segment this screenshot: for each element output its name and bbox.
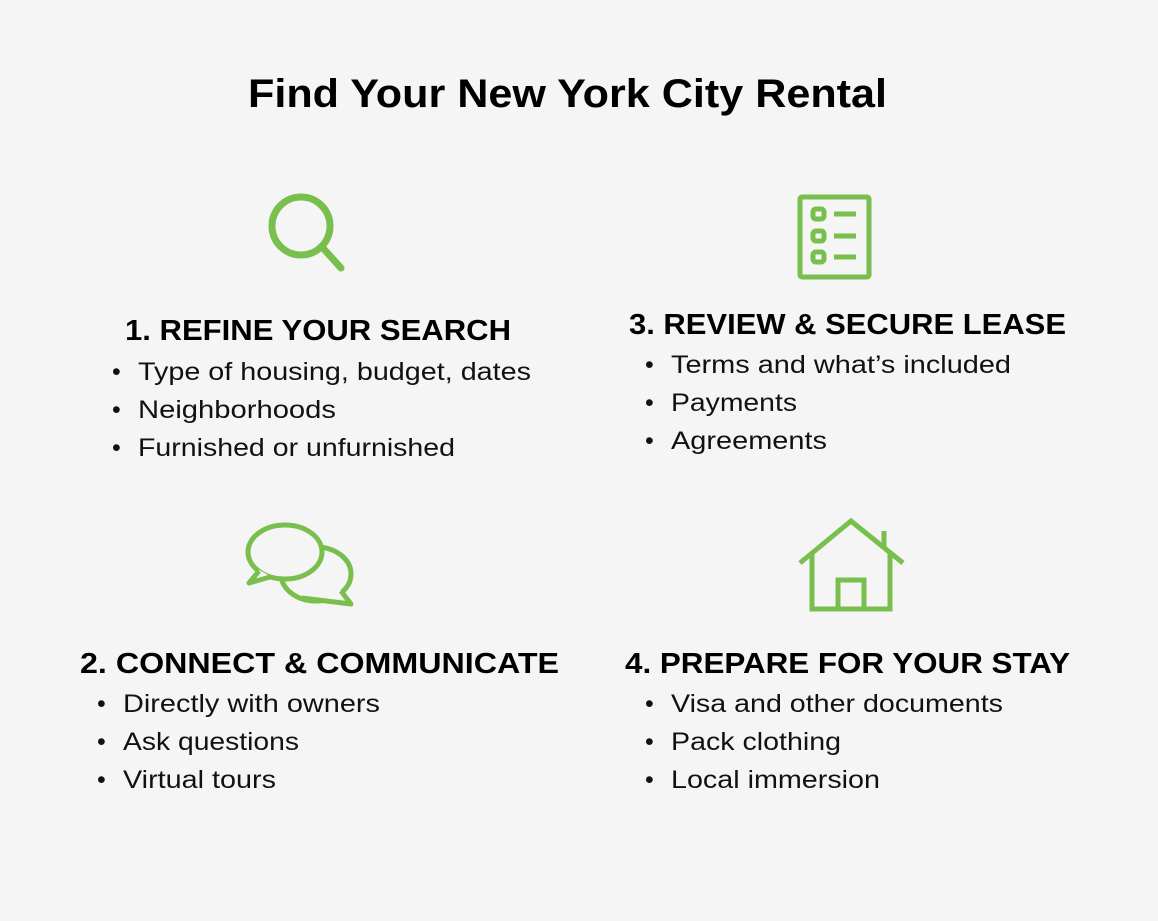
- panel: review lease: Terms and what’s included: [671, 351, 1011, 379]
- panel: prepare: 4. PREPARE FOR YOUR STAY: [625, 648, 1070, 680]
- panel: connect: •: [97, 766, 106, 794]
- panel: connect: Directly with owners: [123, 690, 380, 718]
- title: Find Your New York City Rental: [248, 72, 887, 116]
- panel: review lease: •: [645, 389, 654, 417]
- icon: chat bubbles: [248, 525, 351, 604]
- panel: review lease: 3. REVIEW & SECURE LEASE: [629, 309, 1066, 341]
- panel: review lease: Agreements: [671, 427, 827, 455]
- panel: connect: •: [97, 690, 106, 718]
- panel: refine search: •: [112, 434, 121, 462]
- icon: magnifier: [272, 197, 341, 268]
- panel: connect: Ask questions: [123, 728, 299, 756]
- panel: review lease: Payments: [671, 389, 797, 417]
- panel: prepare: •: [645, 766, 654, 794]
- icon: checklist: [800, 197, 869, 277]
- panel: refine search: 1. REFINE YOUR SEARCH: [125, 315, 511, 347]
- panel: connect: [80, 648, 559, 794]
- panel: prepare: Local immersion: [671, 766, 880, 794]
- panel: connect: 2. CONNECT & COMMUNICATE: [80, 648, 559, 680]
- panel: refine search: [112, 315, 531, 462]
- panel: connect: •: [97, 728, 106, 756]
- panel: prepare: •: [645, 728, 654, 756]
- panel: prepare: Pack clothing: [671, 728, 841, 756]
- panel: review lease: •: [645, 427, 654, 455]
- panel: refine search: Type of housing, budget, dates: [138, 358, 531, 386]
- panel: refine search: •: [112, 358, 121, 386]
- panel: review lease: •: [645, 351, 654, 379]
- panel: refine search: Furnished or unfurnished: [138, 434, 455, 462]
- panel: refine search: Neighborhoods: [138, 396, 336, 424]
- panel: prepare: Visa and other documents: [671, 690, 1003, 718]
- panel: connect: Virtual tours: [123, 766, 276, 794]
- icon: house: [800, 521, 903, 609]
- panel: refine search: •: [112, 396, 121, 424]
- panel: review lease: [629, 309, 1066, 455]
- panel: prepare: [625, 648, 1070, 794]
- panel: prepare: •: [645, 690, 654, 718]
